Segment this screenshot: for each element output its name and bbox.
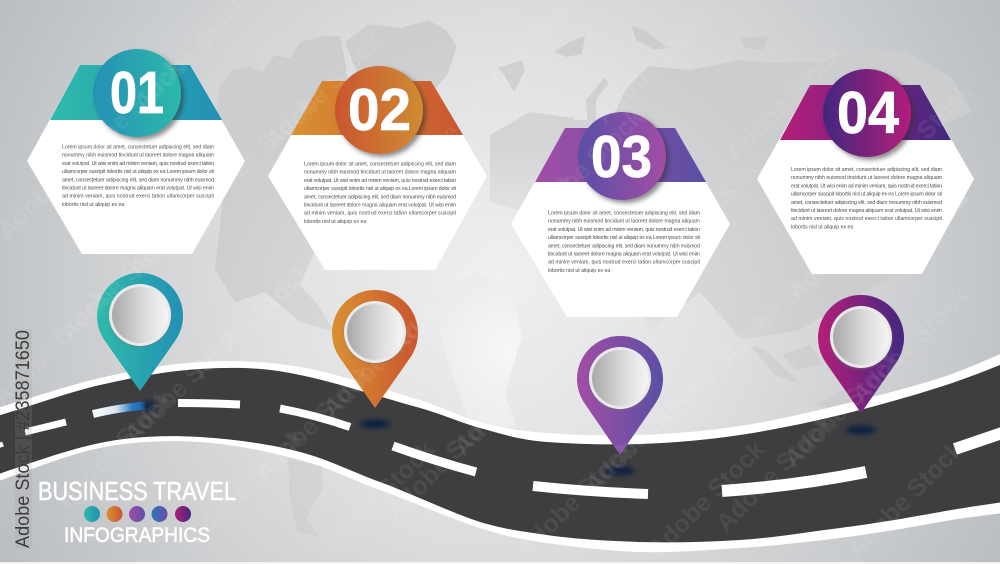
body text 03: ullamcorper suscipit lobortis nisl ut aliquip ex ea Lorem ipsum dolor sit [548, 235, 701, 241]
body text 01: ad minim veniam, quis nostrud exerci tation ullamcorper suscipit [62, 194, 215, 200]
watermark pattern: Adobe Stock [259, 27, 387, 155]
map: Australia [815, 390, 862, 408]
watermark pattern: Adobe Stock [647, 307, 775, 435]
body text 02: Lorem ipsum dolor sit amet, consectetuer adipiscing elit, sed diam [304, 162, 456, 168]
watermark pattern: Adobe Stock [841, 435, 969, 563]
watermark pattern: Adobe Stock [385, 231, 513, 359]
number badge 04 [823, 69, 911, 157]
body text 04: tincidunt ut laoreet dolore magna aliquam erat volutpat. Ut wisi enim [791, 208, 942, 214]
title: infographics: INFOGRAPHICS [64, 524, 210, 547]
watermark pattern: Adobe Stock [55, 219, 183, 347]
road: asphalt [0, 361, 1000, 542]
watermark pattern: Adobe Stock [720, 39, 848, 167]
body text 04: ullamcorper suscipit lobortis nisl ut aliquip ex ea Lorem ipsum dolor sit [791, 192, 943, 198]
body text 02: nonummy nibh euismod tincidunt ut laoreet dolore magna aliquam [304, 170, 456, 176]
body text 02 [304, 162, 457, 225]
header band 01 [50, 65, 222, 120]
watermark pattern: Adobe Stock [783, 179, 911, 307]
body text 04: Lorem ipsum dolor sit amet, consectetuer adipiscing elit, sed diam [791, 167, 942, 173]
watermark pattern: Adobe Stock [652, 141, 780, 269]
body text 03: lobortis nisl ut aliquip ex ea [548, 268, 610, 274]
hexagon card 03 [511, 128, 730, 317]
number badge 04: 04 [837, 80, 899, 146]
panel: step 01 [27, 49, 245, 254]
watermark pattern: Adobe Stock [715, 243, 843, 371]
watermark pattern: Adobe Stock [521, 103, 649, 231]
title block [38, 478, 236, 547]
header band 03 [535, 128, 706, 182]
hexagon card 01 [27, 65, 245, 254]
panel: step 04 [757, 69, 974, 274]
watermark pattern: Adobe Stock [254, 193, 382, 321]
body text 02: lobortis nisl ut aliquip ex ea [304, 219, 366, 225]
body text 01: lobortis nisl ut aliquip ex ea [62, 202, 124, 208]
icon: map pin 3 [577, 336, 663, 455]
watermark pattern: Adobe Stock [710, 409, 838, 537]
body text 03: amet, consectetuer adipiscing elit, sed diam nonummy nibh euismod [548, 243, 700, 249]
watermark pattern: Adobe Stock [778, 345, 906, 473]
map: Europe [490, 112, 574, 214]
map: Asia [520, 48, 972, 340]
map: Indonesia [750, 345, 822, 385]
watermark pattern: Adobe Stock [589, 1, 717, 129]
icon: map pin 1 [97, 273, 183, 391]
world map [215, 20, 972, 536]
body text 02: tincidunt ut laoreet dolore magna aliquam erat volutpat. Ut wisi enim [304, 202, 456, 208]
watermark pattern: Adobe Stock [317, 295, 445, 423]
body text 01: erat volutpat. Ut wisi enim ad minim veniam, quis nostrud exerci tation [62, 161, 214, 167]
watermark pattern: Adobe Stock [846, 281, 974, 409]
body text 03: tincidunt ut laoreet dolore magna aliquam erat volutpat. Ut wisi enim [548, 252, 700, 258]
watermark pattern: Adobe Stock [123, 155, 251, 283]
watermark pattern: Adobe Stock [312, 435, 440, 563]
watermark pattern: Adobe Stock [181, 423, 309, 551]
map: North America [215, 36, 352, 332]
header band 04 [780, 85, 951, 140]
number badge 02: 02 [348, 77, 411, 143]
body text 02: ad minim veniam, quis nostrud exerci tation ullamcorper suscipit [304, 211, 457, 217]
title: business travel: BUSINESS TRAVEL [38, 478, 236, 506]
watermark pattern: Adobe Stock [60, 53, 188, 181]
icon: map pin 2 [332, 290, 418, 408]
watermark pattern: Adobe Stock [249, 359, 377, 487]
body text 03: nonummy nibh euismod tincidunt ut laoreet dolore magna aliquam [548, 219, 700, 225]
watermark pattern: Adobe Stock [186, 257, 314, 385]
body text 04: amet, consectetuer adipiscing elit, sed diam nonummy nibh euismod [791, 200, 942, 206]
body text 03: Lorem ipsum dolor sit amet, consectetuer adipiscing elit, sed diam [548, 210, 700, 216]
watermark pattern: Adobe Stock [516, 269, 644, 397]
map: South America [288, 458, 322, 536]
body text 04: lobortis nisl ut aliquip ex ea [791, 224, 853, 230]
body text 01: tincidunt ut laoreet dolore magna aliquam erat volutpat. Ut wisi enim [62, 186, 214, 192]
watermark pattern: Adobe Stock [851, 77, 979, 205]
body text 04 [791, 167, 943, 230]
number badge 03 [578, 112, 666, 200]
watermark pattern: Adobe Stock [453, 167, 581, 295]
watermark pattern: Adobe Stock [118, 321, 246, 449]
watermark pattern: Adobe Stock [390, 65, 518, 193]
map: Arctic islands [498, 26, 770, 128]
colour dots [84, 506, 191, 522]
watermark pattern: Adobe Stock [50, 385, 178, 513]
watermark pattern: Adobe Stock [380, 397, 508, 525]
stock id label: Adobe Stock | #235871650 [13, 330, 34, 548]
watermark pattern: Adobe Stock [579, 371, 707, 499]
panel: step 03 [511, 112, 730, 317]
road: white edge lines [0, 350, 1000, 552]
hexagon card 04 [757, 85, 974, 274]
body text 01: amet, consectetuer adipiscing elit, sed diam nonummy nibh euismod [62, 177, 214, 183]
road: blue highlighted dash [93, 406, 145, 414]
panel: step 02 [268, 66, 487, 270]
header band 02 [291, 81, 463, 135]
body text 02: amet, consectetuer adipiscing elit, sed diam nonummy nibh euismod [304, 194, 456, 200]
hexagon card 02 [268, 81, 487, 270]
map: Greenland [345, 20, 457, 92]
watermark pattern: Adobe Stock [584, 205, 712, 333]
body text 03 [548, 210, 701, 274]
road [0, 350, 1000, 552]
body text 03: erat volutpat. Ut wisi enim ad minim veniam, quis nostrud exerci tation [548, 227, 700, 233]
body text 04: nonummy nibh euismod tincidunt ut laoreet dolore magna aliquam [791, 175, 942, 181]
body text 03: ad minim veniam, quis nostrud exerci tation ullamcorper suscipit [548, 260, 701, 266]
road: centre dashes [0, 403, 1000, 494]
number badge 02 [335, 66, 423, 154]
body text 04: ad minim veniam, quis nostrud exerci tation ullamcorper suscipit [791, 216, 943, 222]
body text 01: ullamcorper suscipit lobortis nisl ut aliquip ex ea Lorem ipsum dolor sit [62, 169, 215, 175]
body text 01: Lorem ipsum dolor sit amet, consectetuer adipiscing elit, sed diam [62, 144, 214, 150]
body text 01 [62, 144, 215, 208]
number badge 03: 03 [591, 124, 652, 190]
number badge 01: 01 [110, 60, 164, 126]
icon: map pin 4 [818, 295, 904, 413]
watermark pattern: Adobe Stock [448, 333, 576, 461]
watermark pattern: Adobe Stock [191, 91, 319, 219]
body text 01: nonummy nibh euismod tincidunt ut laoreet dolore magna aliquam [62, 153, 214, 159]
number badge 01 [93, 49, 181, 137]
body text 02: erat volutpat. Ut wisi enim ad minim veniam, quis nostrud exerci tation [304, 178, 456, 184]
map: Africa [432, 272, 522, 428]
watermark pattern: Adobe Stock [511, 435, 639, 563]
body text 04: erat volutpat. Ut wisi enim ad minim veniam, quis nostrud exerci tation [791, 183, 942, 189]
pin shadows on road [143, 400, 876, 476]
body text 02: ullamcorper suscipit lobortis nisl ut aliquip ex ea Lorem ipsum dolor sit [304, 186, 457, 192]
watermark pattern: Adobe Stock [642, 435, 770, 563]
watermark pattern: Adobe Stock [322, 129, 450, 257]
